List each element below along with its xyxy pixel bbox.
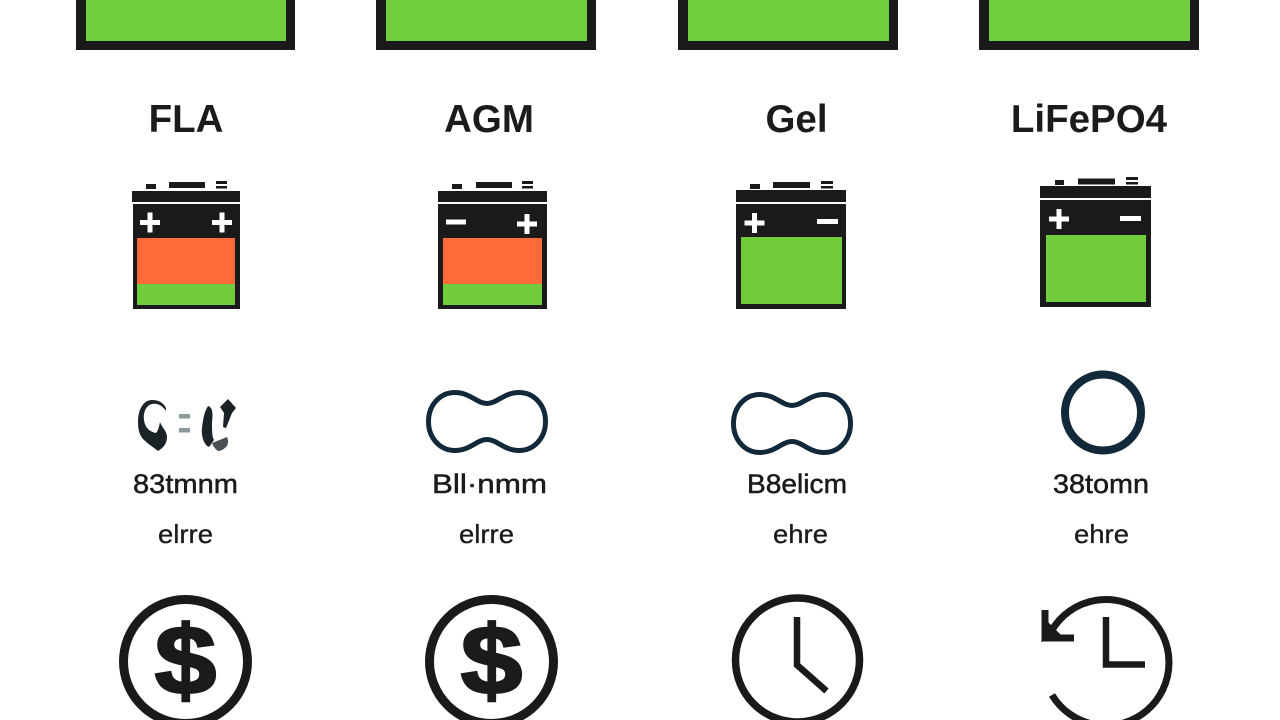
heading: FLA: FLA	[149, 98, 223, 141]
icon: Gel clock	[736, 598, 860, 720]
top green battery cell: Gel	[678, 0, 898, 50]
icon: FLA split shapes	[138, 399, 236, 451]
icon: AGM dollar coin: $	[461, 607, 522, 715]
label: LiFePO4 measurement: 38tomn	[1053, 469, 1149, 499]
top green battery cell: AGM	[376, 0, 596, 50]
label: Gel note: ehre	[773, 519, 828, 549]
icon: Gel peanut loop	[734, 394, 850, 452]
icon: FLA battery	[132, 181, 240, 309]
panel: FLA column	[76, 0, 295, 720]
icon: AGM peanut loop	[428, 392, 546, 450]
icon: Gel battery	[736, 181, 846, 309]
label: FLA note: elrre	[158, 519, 213, 549]
top green battery cell: FLA	[76, 0, 295, 50]
icon: LiFePO4 ring	[1065, 374, 1141, 450]
panel: Gel column	[678, 0, 898, 720]
heading: Gel: Gel	[765, 98, 828, 141]
icon: AGM dollar coin	[430, 600, 554, 720]
icon: FLA dollar coin	[124, 600, 248, 720]
icon: LiFePO4 battery	[1040, 177, 1151, 307]
heading: AGM: AGM	[444, 98, 534, 141]
icon: AGM battery	[438, 181, 547, 309]
panel: AGM column	[376, 0, 596, 720]
label: AGM measurement: Bll·nmm	[432, 469, 547, 499]
top green battery cell: LiFePO4	[979, 0, 1199, 50]
label: AGM note: elrre	[459, 519, 514, 549]
panel: LiFePO4 column	[979, 0, 1199, 720]
icon: LiFePO4 cycle history clock	[1041, 600, 1169, 720]
icon: FLA dollar coin: $	[155, 607, 216, 715]
label: Gel measurement: B8elicm	[747, 469, 847, 499]
label: LiFePO4 note: ehre	[1074, 519, 1129, 549]
label: FLA measurement: 83tmnm	[133, 469, 238, 499]
heading: LiFePO4: LiFePO4	[1011, 98, 1168, 141]
